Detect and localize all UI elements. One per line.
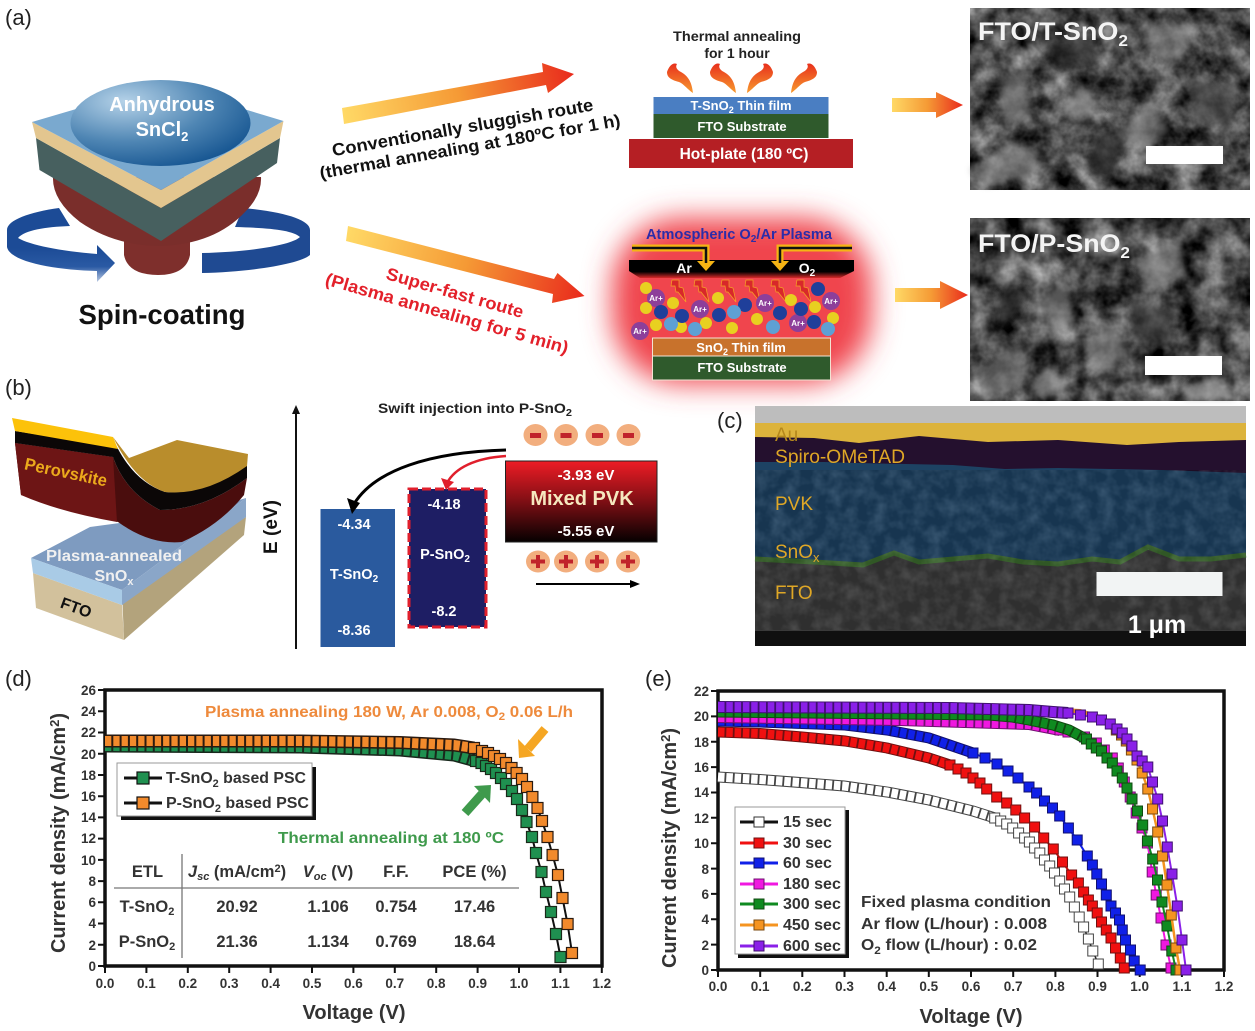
- heading: thermal annealing: Thermal annealing: [673, 28, 801, 44]
- y tick labels: 18: [81, 768, 96, 783]
- plasma condition note: 2: [874, 945, 881, 957]
- heading swift injection: Swift injection into P-SnO: [378, 400, 549, 416]
- layer label: SnO2: SnO: [696, 340, 723, 355]
- x tick labels: 1.1: [1173, 979, 1192, 994]
- droplet formula: 2: [181, 129, 188, 144]
- legend: T-SnO: [166, 770, 213, 787]
- results table: 20.92: [216, 898, 258, 916]
- y tick labels: 22: [81, 725, 96, 740]
- ticks: [711, 691, 1224, 977]
- PVK name: Mixed PVK: [530, 488, 634, 510]
- heading: atmospheric plasma: 2: [751, 234, 757, 245]
- results table: 17.46: [454, 898, 495, 916]
- y tick labels: 14: [694, 785, 709, 800]
- x tick labels: 0.5: [919, 979, 939, 994]
- gas label O2: 2: [810, 268, 816, 279]
- label plasma-annealed: Plasma-annealed: [46, 548, 182, 565]
- legend 300 sec: 300 sec: [783, 896, 841, 913]
- label: Ar+ ions: [633, 294, 838, 336]
- T-SnO2 VBM value: -8.36: [337, 623, 371, 639]
- black hole-transport band: [15, 431, 247, 510]
- legend: based PSC: [219, 770, 306, 787]
- results table: 21.36: [216, 933, 258, 951]
- x tick labels: 0.6: [344, 976, 363, 991]
- results table: ETL: [132, 863, 163, 881]
- y axis title: ): [659, 728, 681, 735]
- scale bar: [1096, 572, 1222, 596]
- label FTO: FTO: [775, 583, 813, 604]
- y tick labels: 6: [701, 887, 709, 902]
- x tick labels: 0.1: [137, 976, 156, 991]
- FTO side face: [122, 517, 246, 640]
- plasma condition note: flow (L/hour) : 0.02: [881, 937, 1037, 954]
- panel b: device schematic: [12, 418, 248, 640]
- panel a: plasma annealing chamber: [612, 218, 872, 384]
- x tick labels: 0.8: [1046, 979, 1065, 994]
- results table: F.F.: [383, 863, 409, 881]
- label: Ar+ ions: Ar+: [791, 319, 805, 328]
- x tick labels: 0.1: [751, 979, 770, 994]
- label: Ar+ ions: Ar+: [633, 327, 647, 336]
- x tick labels: 0.3: [835, 979, 854, 994]
- icon: O- ions light: [664, 305, 835, 336]
- y tick labels: 16: [81, 789, 96, 804]
- y tick labels: 20: [694, 709, 709, 724]
- panel label (d): (d): [5, 666, 32, 691]
- axis frame: [105, 690, 602, 966]
- SEM scale bar: [1145, 356, 1222, 375]
- legend 60 sec: [740, 855, 832, 872]
- layer label: SnO2: 2: [723, 347, 728, 357]
- texture overlay: [755, 470, 1246, 630]
- perovskite body: [15, 443, 247, 542]
- SnOx top face: [31, 498, 246, 590]
- label: Ar+ ions: Ar+: [824, 297, 838, 306]
- arrow orange: [518, 729, 545, 758]
- plasma glow: [612, 218, 872, 384]
- panel d: J-V chart: [47, 683, 611, 1024]
- SEM title: 2: [1118, 33, 1128, 50]
- SEM scale bar: [1146, 146, 1223, 164]
- gas label O2: O: [799, 260, 810, 276]
- arrow head red: [441, 478, 454, 490]
- x tick labels: 0.7: [385, 976, 404, 991]
- text: plasma route label: (Plasma annealing for 5 min): [323, 269, 571, 358]
- y tick labels: 10: [694, 836, 709, 851]
- icon: plasma discharges: [671, 280, 811, 302]
- Au layer: [755, 423, 1246, 445]
- PVK LUMO value: -3.93 eV: [558, 467, 614, 484]
- y tick labels: 20: [81, 747, 96, 762]
- energy axis arrow: [292, 405, 300, 649]
- y tick labels: 4: [701, 912, 709, 927]
- x tick labels: 0.9: [1088, 979, 1107, 994]
- legend 300 sec: [740, 896, 841, 913]
- results table: 0.754: [375, 898, 417, 916]
- SnOx line: [755, 547, 1246, 565]
- y tick labels: 10: [81, 853, 96, 868]
- legend 450 sec: 450 sec: [783, 917, 841, 934]
- icon: chuck dome: [53, 177, 261, 246]
- PVK layer: [755, 462, 1246, 563]
- icon: O2 molecules: [640, 282, 839, 334]
- layer label: SnO2: Thin film: [728, 340, 786, 355]
- arrow green: [465, 785, 491, 813]
- label SnOx: x: [813, 550, 820, 565]
- label: Ar+ ions: Ar+: [693, 305, 707, 314]
- legend: 2: [213, 778, 219, 790]
- y tick labels: 24: [81, 704, 96, 719]
- SnOx right edge: [122, 498, 246, 605]
- caption spin-coating: Spin-coating: [78, 299, 246, 330]
- icon: blue rotation arrow right: [202, 208, 310, 273]
- heading: atmospheric plasma: /Ar Plasma: [756, 227, 833, 243]
- results table: 2: [168, 906, 174, 918]
- results table: 2: [169, 941, 175, 953]
- x tick labels: 1.2: [592, 976, 611, 991]
- arrow: hole direction: [536, 580, 640, 588]
- FTO front face: [33, 573, 124, 640]
- series 180 sec: [718, 717, 1171, 968]
- panel label (a): (a): [5, 5, 32, 30]
- T-SnO2 CBM value: -4.34: [337, 517, 371, 533]
- legend 600 sec: 600 sec: [783, 938, 841, 955]
- legend 180 sec: 180 sec: [783, 876, 841, 893]
- scale label: 1 μm: [1128, 611, 1186, 639]
- plasma condition note: Fixed plasma condition: [861, 894, 1051, 911]
- results table: ): [281, 863, 286, 881]
- x tick labels: 1.0: [1130, 979, 1149, 994]
- arrow: conventional route: [342, 63, 574, 124]
- label Spiro-OMeTAD: Spiro-OMeTAD: [775, 447, 905, 468]
- panel label (e): (e): [645, 666, 672, 691]
- layer: T-SnO2 thin film: [654, 97, 828, 114]
- SEM title: FTO/P-SnO: [978, 230, 1111, 258]
- legend: [117, 763, 316, 820]
- layer label: hot-plate: Hot-plate (180 ºC): [680, 146, 808, 163]
- label Au: Au: [775, 425, 798, 446]
- icon: blue rotation arrow left: [7, 208, 115, 282]
- SnOx front face: [31, 558, 122, 605]
- y tick labels: 12: [81, 831, 96, 846]
- gas label Ar: Ar: [676, 260, 692, 276]
- legend: [735, 807, 849, 958]
- layer: hot-plate: [629, 139, 853, 168]
- text: plasma route label: Super-fast route: [384, 264, 526, 322]
- callout plasma annealing: Plasma annealing 180 W, Ar 0.008, O: [205, 704, 482, 721]
- SEM title: 2: [1120, 245, 1130, 262]
- icon: substrate top face: [32, 84, 284, 190]
- layer label: FTO: FTO Substrate: [697, 360, 787, 375]
- label: Ar+ ions: Ar+: [758, 299, 772, 308]
- layer: FTO substrate: [652, 356, 830, 380]
- arrow: O2 inflow: [771, 248, 852, 271]
- legend 15 sec: [740, 814, 832, 831]
- series 15 sec: [718, 777, 1098, 964]
- heading swift injection: 2: [566, 408, 572, 419]
- plasma condition note: Ar flow (L/hour) : 0.008: [861, 916, 1047, 933]
- panel a: SEM image P-SnO2: [970, 218, 1250, 401]
- x tick labels: 1.0: [510, 976, 528, 991]
- arrow: to SEM T-SnO2: [892, 92, 963, 118]
- x tick labels: 0.3: [220, 976, 239, 991]
- legend 450 sec: [740, 917, 841, 934]
- series 60 sec: [718, 721, 1140, 970]
- heading: duration: for 1 hour: [704, 45, 770, 61]
- callout thermal annealing: Thermal annealing at 180 ºC: [278, 830, 504, 847]
- callout plasma annealing: 2: [499, 711, 505, 723]
- series 30 sec: [718, 732, 1124, 968]
- results table: [114, 854, 519, 958]
- panel e: J-V chart: [658, 684, 1233, 1028]
- label SnOx: SnO: [94, 568, 127, 585]
- icon: precursor droplet: [70, 80, 250, 166]
- legend: P-SnO: [166, 795, 215, 812]
- legend 30 sec: [740, 835, 832, 852]
- y tick labels: [81, 683, 96, 974]
- y tick labels: 18: [694, 735, 709, 750]
- results table: oc: [314, 871, 327, 883]
- results table: sc: [197, 871, 209, 883]
- panel a: thermal annealing stack: [629, 28, 853, 168]
- y tick labels: 4: [88, 916, 96, 931]
- series 600 sec: [718, 707, 1186, 970]
- results table: J: [188, 863, 198, 881]
- x tick labels: 0.0: [96, 976, 114, 991]
- y tick labels: 16: [694, 760, 709, 775]
- x tick labels: [96, 976, 611, 991]
- x tick labels: 0.0: [709, 979, 727, 994]
- icon: O- ions dark: [654, 282, 825, 329]
- layer label: T-SnO2: Thin film: [734, 98, 792, 113]
- SEM title: FTO/T-SnO: [978, 18, 1108, 46]
- x tick labels: 0.2: [793, 979, 812, 994]
- x tick labels: 0.4: [877, 979, 897, 994]
- arrow head black: [347, 498, 360, 514]
- text: conventional route label: [315, 90, 622, 183]
- icon: chuck stem: [124, 238, 190, 275]
- droplet label: Anhydrous: [109, 94, 215, 116]
- T-SnO2 bar: [320, 509, 395, 647]
- series P-SnO2: [105, 741, 572, 953]
- capping gray: [755, 406, 1246, 426]
- legend 60 sec: 60 sec: [783, 855, 832, 872]
- axis frame: [718, 691, 1224, 970]
- y tick labels: 22: [694, 684, 709, 699]
- y tick labels: 8: [701, 862, 709, 877]
- P-SnO2 name: 2: [464, 554, 470, 565]
- P-SnO2 CBM value: -4.18: [427, 497, 461, 513]
- results table: 2: [274, 863, 281, 875]
- y axis title: Current density (mA/cm: [659, 741, 681, 968]
- y tick labels: 2: [88, 938, 96, 953]
- FTO base: [755, 631, 1246, 646]
- mixed PVK block: [506, 461, 657, 542]
- icon: heat flames: [667, 63, 817, 93]
- axis label: E (eV): [261, 500, 282, 554]
- layer: SnO2 thin film: [652, 338, 830, 356]
- results table: (V): [327, 863, 353, 881]
- results table: 1.134: [307, 933, 349, 951]
- y axis title: 2: [47, 720, 62, 727]
- results table: T-SnO: [120, 898, 168, 916]
- P-SnO2 VBM value: -8.2: [432, 604, 456, 620]
- arrow: to SEM P-SnO2: [895, 281, 968, 309]
- results table: P-SnO: [119, 933, 169, 951]
- PVK HOMO value: -5.55 eV: [558, 523, 614, 540]
- results table: 18.64: [454, 933, 496, 951]
- perovskite front face: [15, 443, 117, 522]
- text: conventional route label: (thermal annealing at 180ºC for 1 h): [318, 111, 622, 183]
- heading: atmospheric plasma: Atmospheric O: [646, 227, 750, 243]
- y tick labels: 0: [88, 959, 96, 974]
- x tick labels: 0.8: [427, 976, 446, 991]
- results table: 1.106: [307, 898, 349, 916]
- plasma nozzle bar: [629, 260, 854, 278]
- label: Ar+ ions: Ar+: [649, 294, 663, 303]
- results table: 0.769: [375, 933, 417, 951]
- y axis title: 2: [658, 735, 673, 742]
- results table: V: [303, 863, 316, 881]
- P-SnO2 bar: [409, 489, 486, 627]
- series 450 sec: [718, 707, 1180, 970]
- y tick labels: 12: [694, 811, 709, 826]
- y tick labels: 14: [81, 810, 96, 825]
- panel b: energy level diagram: [261, 400, 657, 649]
- results table: (mA/cm: [209, 863, 274, 881]
- ticks: [98, 690, 602, 973]
- y tick labels: 6: [88, 895, 96, 910]
- panel label (c): (c): [717, 408, 743, 433]
- layer: FTO substrate: [654, 114, 828, 138]
- icon: substrate gray layer: [36, 138, 280, 241]
- x tick labels: 0.4: [261, 976, 280, 991]
- x tick labels: 0.9: [468, 976, 487, 991]
- legend: based PSC: [221, 795, 309, 812]
- label FTO: FTO: [58, 595, 94, 622]
- arrow: injection into T-SnO2: [354, 450, 506, 504]
- legend 15 sec: 15 sec: [783, 814, 832, 831]
- P-SnO2 name: P-SnO: [420, 547, 464, 563]
- legend 30 sec: 30 sec: [783, 835, 832, 852]
- x axis title: Voltage (V): [303, 1002, 405, 1024]
- series 300 sec: [718, 712, 1176, 970]
- series T-SnO2: [105, 746, 560, 957]
- plasma condition note: O: [861, 937, 873, 954]
- layer label: FTO: FTO Substrate: [697, 119, 787, 134]
- layer label: T-SnO2: 2: [729, 105, 734, 115]
- droplet formula: SnCl: [136, 119, 181, 141]
- plasma condition note: [861, 894, 1051, 957]
- y tick labels: [694, 684, 709, 978]
- x tick labels: 0.6: [962, 979, 981, 994]
- x tick labels: 0.5: [303, 976, 322, 991]
- y tick labels: 0: [701, 963, 709, 978]
- panel c: cross-section SEM: [755, 406, 1246, 646]
- legend 180 sec: [740, 876, 841, 893]
- x tick labels: 1.2: [1215, 979, 1233, 994]
- y tick labels: 2: [701, 938, 709, 953]
- panel a: SEM image T-SnO2: [970, 8, 1250, 190]
- gold electrode back: [113, 437, 248, 492]
- y tick labels: 8: [88, 874, 96, 889]
- x axis title: Voltage (V): [920, 1006, 1022, 1028]
- label SnOx: SnO: [775, 542, 813, 563]
- y axis title: Current density (mA/cm: [48, 726, 70, 953]
- label perovskite: Perovskite: [23, 454, 109, 491]
- panel a: spin-coating diagram: [7, 80, 310, 330]
- x tick labels: 0.2: [178, 976, 197, 991]
- layer label: T-SnO2: T-SnO: [690, 98, 729, 113]
- label PVK: PVK: [775, 494, 813, 515]
- x tick labels: [709, 979, 1233, 994]
- arrow: Ar inflow: [632, 248, 715, 271]
- holes: [526, 550, 640, 572]
- legend 600 sec: [740, 938, 841, 955]
- text: conventional route label: Conventionally sluggish route: [330, 94, 595, 160]
- callout plasma annealing: 0.06 L/h: [505, 704, 573, 721]
- legend: 2: [215, 803, 221, 815]
- label SnOx: x: [127, 576, 134, 588]
- x tick labels: 0.7: [1004, 979, 1023, 994]
- y tick labels: 26: [81, 683, 96, 698]
- panel label (b): (b): [5, 375, 32, 400]
- Spiro layer: [755, 436, 1246, 475]
- results table: PCE (%): [442, 863, 507, 881]
- electrons: [524, 424, 640, 446]
- FTO layer: [755, 550, 1246, 632]
- T-SnO2 name: 2: [373, 574, 379, 585]
- arrow: plasma route: [346, 226, 584, 303]
- icon: substrate tan layer: [32, 121, 284, 208]
- x tick labels: 1.1: [551, 976, 570, 991]
- gold electrode strip: [12, 418, 118, 449]
- arrow: injection into P-SnO2: [447, 456, 506, 483]
- T-SnO2 name: T-SnO: [330, 567, 373, 583]
- y axis title: ): [48, 713, 70, 720]
- icon: Ar+ ions: [631, 289, 840, 340]
